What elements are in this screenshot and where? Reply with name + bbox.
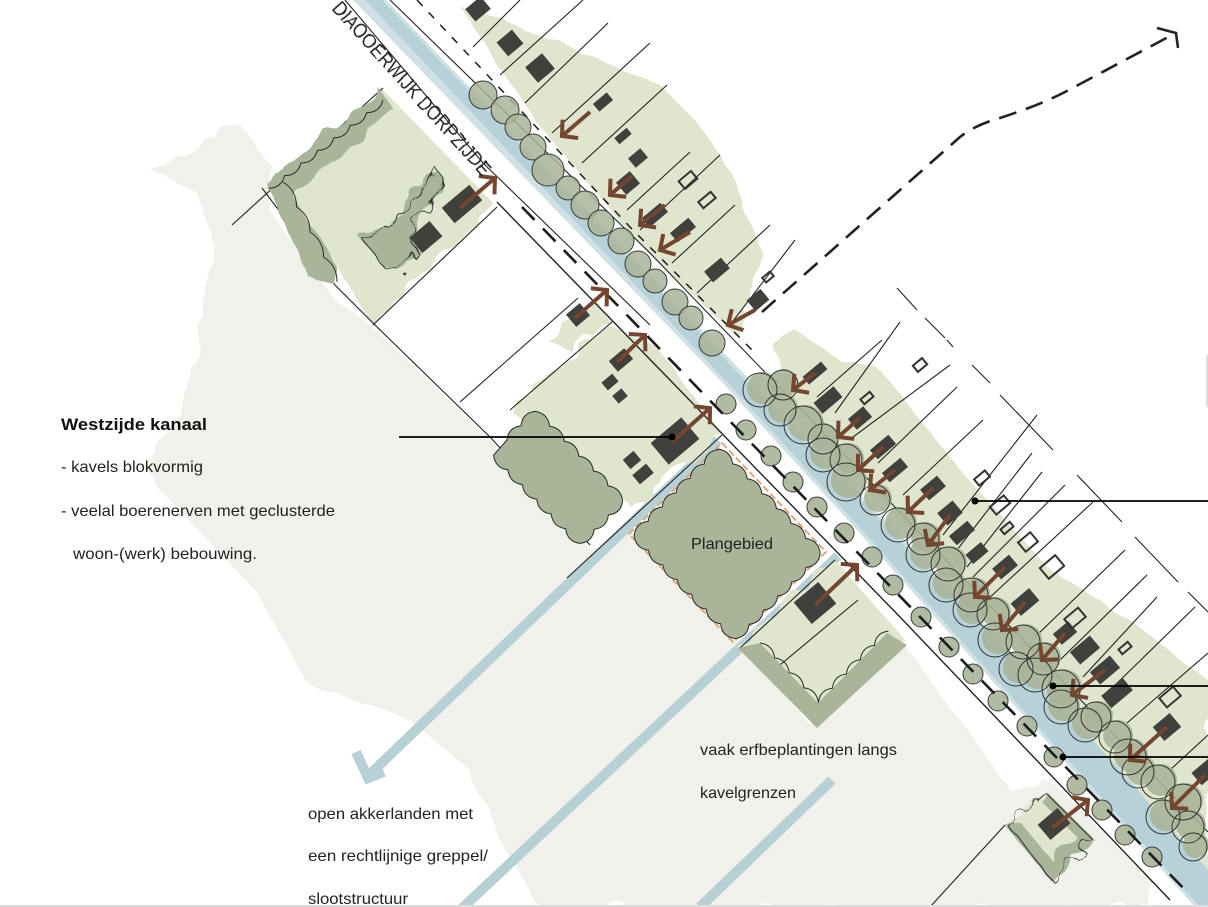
parcel middle [510, 325, 722, 505]
line 1: open akkerlanden met [308, 806, 474, 823]
west road line [345, 0, 650, 325]
tree row along canal west side [716, 394, 1162, 867]
parcel north-west [283, 90, 497, 325]
bullet 2 continuation: woon-(werk) bebouwing. [72, 546, 257, 563]
east dash-dot boundary [897, 288, 1208, 612]
callout west [399, 436, 672, 438]
hedge sketch outlines [268, 100, 1093, 878]
pale farmland background [150, 125, 1150, 907]
buildings [410, 0, 1208, 840]
north-west hedge inner edge [268, 100, 383, 188]
small yard hedge [1005, 790, 1095, 880]
east strip south [775, 330, 1208, 870]
west hedge block [494, 411, 623, 543]
north-west hedge top [265, 90, 392, 205]
line 2: kavelgrenzen [700, 785, 796, 802]
canal [353, 0, 1208, 907]
heading: Westzijde kanaal [61, 416, 207, 434]
hedges [265, 90, 1095, 880]
canal dark band [365, 0, 1208, 907]
text block: yard planting [700, 742, 897, 802]
arrow head [1157, 28, 1178, 48]
tree row south foliage [747, 369, 1208, 858]
line 2: een rechtlijnige greppel/ [308, 848, 489, 865]
callout dot west [669, 434, 675, 440]
canal light band [353, 0, 1208, 907]
bullet 2: - veelal boerenerven met geclusterde [61, 503, 335, 520]
west hedge scalloped outline [494, 411, 623, 543]
text block: westzijde kanaal [61, 416, 335, 563]
canal east line [390, 0, 1208, 832]
callout dot east 3 [1060, 754, 1066, 760]
small patch [548, 300, 612, 350]
label: plan area: Plangebied [691, 536, 773, 553]
tree row north [469, 81, 725, 356]
plan area hedge fill [634, 449, 820, 638]
ditch with arrow [356, 440, 718, 778]
ditch centre [458, 556, 838, 907]
line 1: vaak erfbeplantingen langs [700, 742, 897, 759]
south hedge inner edge [760, 631, 888, 703]
callout lines [399, 434, 1208, 760]
ditches: field drainage structure [356, 440, 838, 907]
callout east 1 [975, 500, 1208, 502]
dashed route [762, 35, 1172, 312]
north-west hedge left [265, 182, 335, 285]
green parcels [283, 4, 1208, 880]
bullet 1: - kavels blokvormig [61, 459, 203, 476]
plan boundary [629, 443, 826, 642]
rear west parcel line [262, 188, 590, 545]
small yard outline [1008, 792, 1093, 878]
road centre dashes [522, 207, 1190, 895]
west lots [232, 88, 858, 665]
plan hedge scalloped outline [634, 449, 820, 639]
east lots north [473, 0, 795, 325]
inner yard hedge [360, 168, 446, 272]
callout dot east 1 [972, 498, 978, 504]
south hedge bottom [738, 633, 907, 728]
right edge rule [1206, 355, 1208, 407]
east lots south [817, 322, 1208, 907]
east buildings south [803, 361, 827, 385]
east strip north [458, 4, 760, 335]
tree row south outlines [743, 370, 1207, 861]
inner yard outline [362, 170, 445, 270]
text block: open farmland [308, 806, 489, 907]
handwritten road name: DIAOOERWIJK DORPZIJDE [327, 0, 495, 180]
brown access arrows [460, 112, 1205, 828]
west buildings [442, 185, 482, 223]
east road dashes [417, 0, 752, 350]
ditch right [700, 780, 832, 907]
bottom edge rule [0, 905, 1208, 907]
callout east 3 [1063, 756, 1208, 758]
big dashed arrow [762, 28, 1178, 312]
north-west hedge left edge [283, 182, 337, 282]
callout dot east 2 [1050, 683, 1056, 689]
outlined outbuildings [679, 171, 1181, 707]
callout east 2 [1053, 685, 1208, 687]
east buildings north [465, 0, 491, 22]
page edge rules [0, 355, 1208, 907]
west parcel line along road [497, 202, 1170, 900]
small farm yard [1005, 790, 1095, 880]
parcel south of plan [735, 560, 905, 725]
